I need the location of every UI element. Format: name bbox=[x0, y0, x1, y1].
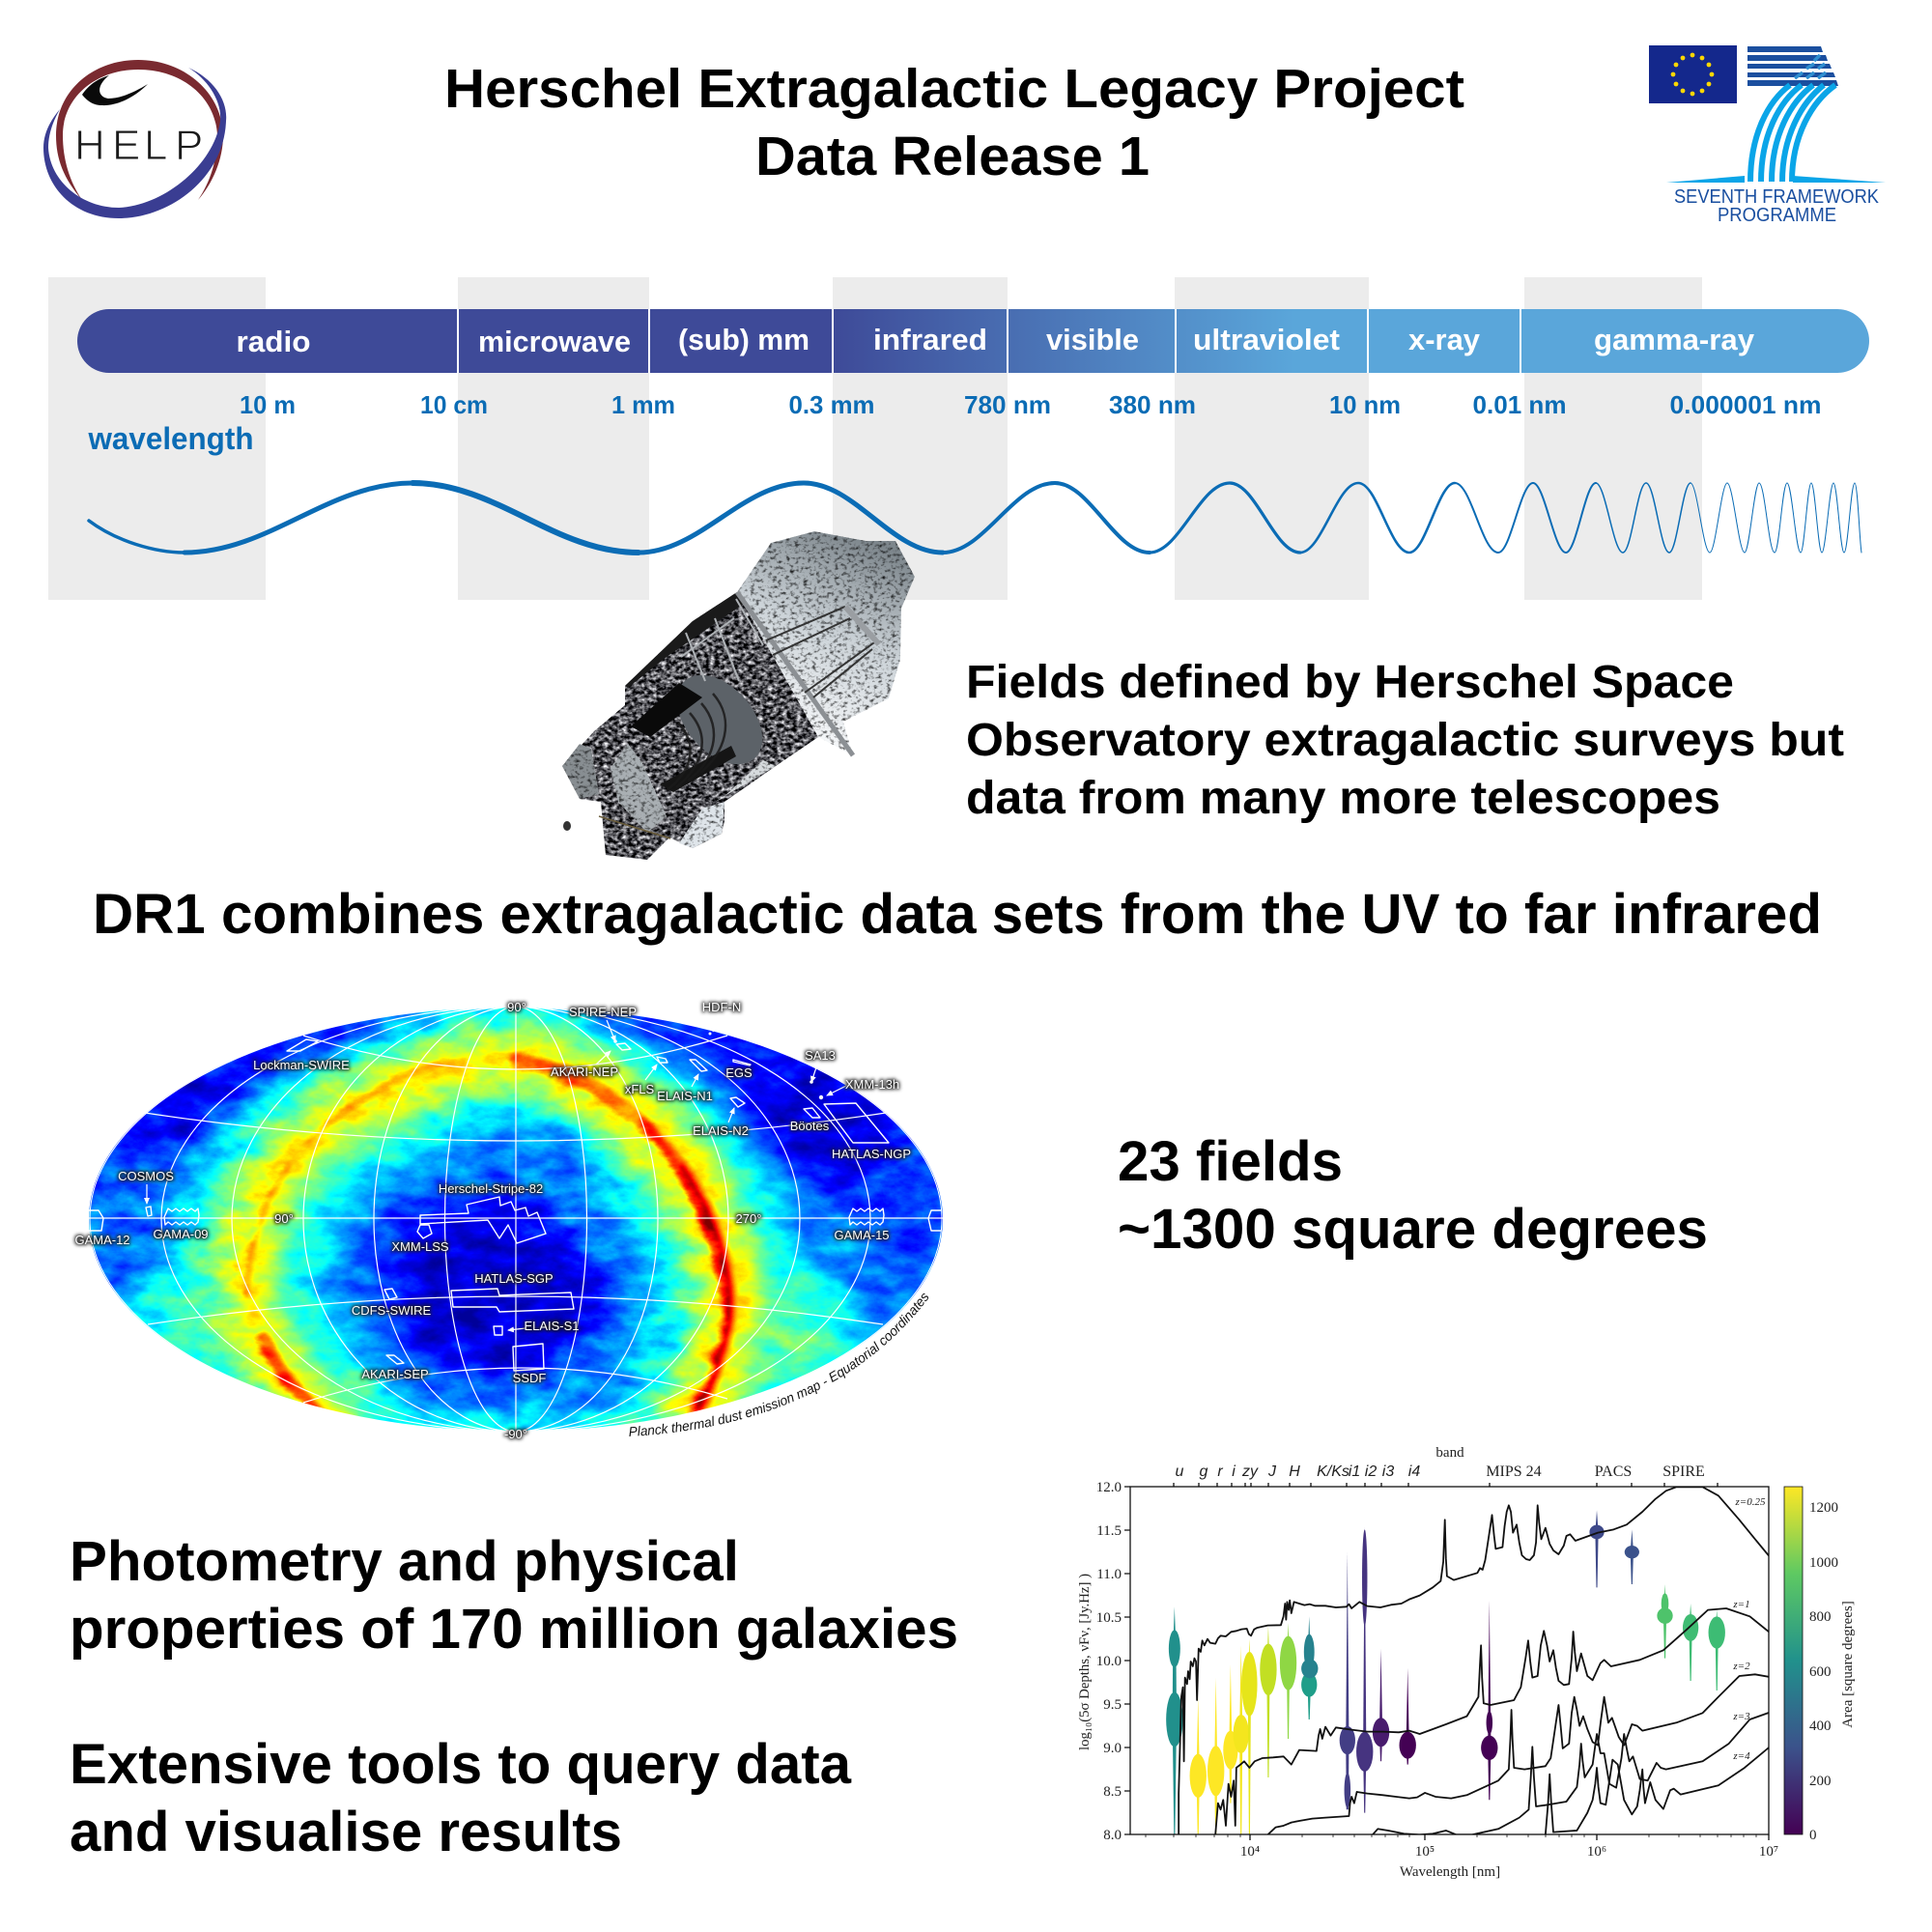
band labels: H bbox=[1289, 1463, 1300, 1480]
map caption: Planck thermal dust emission map - Equatorial coordinates bbox=[629, 1293, 928, 1436]
text block: photometry and tools: Photometry and physical bbox=[70, 1530, 739, 1593]
field labels: Lockman-SWIRE bbox=[253, 1058, 350, 1072]
field labels: ELAIS-N2 bbox=[693, 1123, 749, 1138]
SED curves bbox=[1179, 1487, 1770, 1834]
field labels: HATLAS-NGP bbox=[832, 1147, 911, 1161]
band labels: band bbox=[1435, 1445, 1464, 1461]
redshift labels: z=4 bbox=[1732, 1750, 1750, 1762]
text block: photometry and tools bbox=[70, 1530, 958, 1863]
y axis: 9.0 bbox=[1103, 1741, 1122, 1756]
y axis: 10.0 bbox=[1096, 1654, 1122, 1669]
band labels bbox=[1176, 1445, 1705, 1480]
title: Herschel Extragalactic Legacy Project bbox=[444, 58, 1464, 120]
text block: field count bbox=[1118, 1130, 1708, 1261]
field labels bbox=[74, 1000, 911, 1441]
heading: DR1 summary: DR1 combines extragalactic data sets from the UV to far infrared bbox=[93, 883, 1822, 946]
wavelength scale labels bbox=[88, 390, 1821, 456]
redshift labels bbox=[1732, 1496, 1766, 1762]
y axis: log₁₀(5σ Depths, νFν, [Jy.Hz] ) bbox=[1077, 1574, 1093, 1750]
field labels: 90° bbox=[507, 1000, 526, 1014]
x axis: 10⁵ bbox=[1415, 1844, 1435, 1860]
electromagnetic spectrum bar: ultraviolet bbox=[1193, 323, 1340, 356]
wavelength scale labels: 1 mm bbox=[611, 390, 675, 419]
heat map bbox=[89, 1008, 943, 1431]
x axis: Wavelength [nm] bbox=[1400, 1864, 1500, 1880]
text block: photometry and tools: properties of 170 million galaxies bbox=[70, 1598, 958, 1661]
text block: fields definition: Observatory extragalactic surveys but bbox=[966, 715, 1844, 766]
Planck thermal dust map with survey fields bbox=[71, 999, 943, 1442]
band labels: K/Ks bbox=[1317, 1463, 1350, 1480]
field labels: ELAIS-S1 bbox=[524, 1319, 580, 1333]
redshift labels: z=1 bbox=[1732, 1599, 1750, 1610]
y axis: 9.5 bbox=[1103, 1697, 1122, 1713]
text block: photometry and tools: and visualise results bbox=[70, 1801, 622, 1863]
x axis: 10⁴ bbox=[1240, 1844, 1260, 1860]
field labels: -90° bbox=[504, 1427, 527, 1441]
y axis: 11.0 bbox=[1096, 1567, 1122, 1582]
redshift labels: z=0.25 bbox=[1735, 1496, 1766, 1508]
text block: field count: ~1300 square degrees bbox=[1118, 1198, 1708, 1261]
field labels: Böotes bbox=[790, 1119, 830, 1133]
x axis: 10⁷ bbox=[1759, 1844, 1778, 1860]
text block: fields definition: Fields defined by Herschel Space bbox=[966, 657, 1734, 708]
band labels: g bbox=[1200, 1463, 1208, 1480]
wavelength scale labels: 0.000001 nm bbox=[1669, 390, 1822, 419]
field labels: GAMA-12 bbox=[74, 1233, 130, 1247]
field labels: 90° bbox=[274, 1211, 294, 1226]
wavelength scale labels: wavelength bbox=[88, 421, 253, 456]
field labels: AKARI-NEP bbox=[551, 1065, 618, 1079]
field labels: Herschel-Stripe-82 bbox=[439, 1181, 543, 1196]
colour bar: 200 bbox=[1809, 1774, 1832, 1789]
band labels: r bbox=[1217, 1463, 1223, 1480]
wavelength scale labels: 0.01 nm bbox=[1472, 390, 1567, 419]
y axis: 11.5 bbox=[1096, 1523, 1122, 1539]
wavelength scale labels: 0.3 mm bbox=[788, 390, 875, 419]
field labels: ELAIS-N1 bbox=[657, 1089, 713, 1103]
survey field outlines bbox=[89, 1039, 941, 1371]
colour bar: 1000 bbox=[1809, 1555, 1838, 1571]
text block: field count: 23 fields bbox=[1118, 1130, 1343, 1193]
field labels: HDF-N bbox=[702, 1000, 741, 1014]
HELP logo: HELP bbox=[74, 122, 203, 169]
colour bar: 400 bbox=[1809, 1719, 1832, 1734]
colour bar: 1200 bbox=[1809, 1500, 1838, 1516]
wave bbox=[89, 483, 1861, 553]
field labels: XMM-13h bbox=[845, 1077, 899, 1092]
colour bar: 600 bbox=[1809, 1664, 1832, 1680]
plot frame and ticks bbox=[1124, 1483, 1769, 1840]
field labels: SA13 bbox=[805, 1048, 836, 1063]
band labels: i1 bbox=[1349, 1463, 1360, 1480]
electromagnetic spectrum bar: visible bbox=[1046, 323, 1139, 356]
band labels: u bbox=[1176, 1463, 1184, 1480]
colour bar bbox=[1784, 1487, 1856, 1843]
field labels: xFLS bbox=[625, 1082, 654, 1096]
y axis: 8.5 bbox=[1103, 1784, 1122, 1800]
electromagnetic spectrum bar: infrared bbox=[873, 323, 987, 356]
field labels: EGS bbox=[725, 1065, 753, 1080]
electromagnetic spectrum bar: (sub) mm bbox=[678, 323, 810, 356]
spectrum background bands bbox=[48, 277, 1702, 600]
field labels: GAMA-15 bbox=[834, 1228, 890, 1242]
programme name: SEVENTH FRAMEWORK bbox=[1674, 186, 1880, 208]
band labels: i bbox=[1232, 1463, 1236, 1480]
field labels: GAMA-09 bbox=[153, 1227, 209, 1241]
wavelength scale labels: 10 nm bbox=[1329, 390, 1401, 419]
electromagnetic spectrum bar: microwave bbox=[478, 325, 631, 358]
HELP logo bbox=[43, 60, 226, 218]
wavelength scale labels: 10 m bbox=[240, 390, 296, 419]
electromagnetic spectrum bar: x-ray bbox=[1408, 323, 1481, 356]
title bbox=[444, 58, 1464, 187]
icon: EU flag bbox=[1649, 45, 1737, 103]
field pointers bbox=[147, 1016, 850, 1330]
band labels: PACS bbox=[1595, 1463, 1632, 1480]
band labels: zy bbox=[1241, 1463, 1259, 1480]
y axis: 12.0 bbox=[1096, 1480, 1122, 1495]
foil and panels bbox=[679, 802, 724, 848]
colour bar: 0 bbox=[1809, 1828, 1816, 1843]
band labels: i3 bbox=[1382, 1463, 1394, 1480]
electromagnetic spectrum bar: radio bbox=[236, 325, 311, 358]
field labels: XMM-LSS bbox=[391, 1239, 449, 1254]
programme name: PROGRAMME bbox=[1718, 205, 1836, 226]
y axis: 10.5 bbox=[1096, 1610, 1122, 1626]
icon: Herschel space telescope bbox=[562, 531, 915, 860]
electromagnetic spectrum bar bbox=[77, 309, 1869, 373]
wavelength scale labels: 780 nm bbox=[964, 390, 1051, 419]
colour bar: Area [square degrees] bbox=[1840, 1601, 1856, 1728]
y axis: 8.0 bbox=[1103, 1828, 1122, 1843]
text block: photometry and tools: Extensive tools to query data bbox=[70, 1733, 852, 1796]
violins bbox=[1166, 1510, 1725, 1834]
electromagnetic spectrum bar: gamma-ray bbox=[1594, 323, 1755, 356]
band labels: i2 bbox=[1365, 1463, 1377, 1480]
wavelength scale labels: 380 nm bbox=[1109, 390, 1196, 419]
field labels: SPIRE-NEP bbox=[569, 1005, 637, 1019]
text block: fields definition: data from many more telescopes bbox=[966, 773, 1720, 824]
graticule bbox=[89, 1007, 943, 1432]
y axis bbox=[1077, 1480, 1122, 1843]
redshift labels: z=3 bbox=[1732, 1711, 1750, 1722]
redshift labels: z=2 bbox=[1732, 1661, 1750, 1672]
wavelength scale labels: 10 cm bbox=[420, 390, 488, 419]
band labels: SPIRE bbox=[1662, 1463, 1705, 1480]
x axis bbox=[1240, 1844, 1778, 1880]
x axis: 10⁶ bbox=[1587, 1844, 1606, 1860]
field labels: CDFS-SWIRE bbox=[352, 1303, 431, 1318]
sunshield bbox=[737, 531, 915, 755]
colour bar: 800 bbox=[1809, 1609, 1832, 1625]
field labels: HATLAS-SGP bbox=[474, 1271, 554, 1286]
field labels: AKARI-SEP bbox=[361, 1367, 429, 1381]
FP7 logo bbox=[1649, 45, 1886, 226]
spacecraft body bbox=[562, 592, 818, 860]
field labels: SSDF bbox=[513, 1371, 546, 1385]
field labels: 270° bbox=[736, 1211, 761, 1226]
band labels: MIPS 24 bbox=[1486, 1463, 1542, 1480]
field labels: COSMOS bbox=[118, 1169, 174, 1183]
small field markers bbox=[613, 1032, 823, 1099]
chart: survey depths and galaxy SEDs bbox=[1077, 1445, 1856, 1880]
text block: fields definition bbox=[966, 657, 1844, 824]
programme name bbox=[1674, 186, 1880, 226]
icon: number seven bbox=[1666, 46, 1886, 183]
band labels: J bbox=[1267, 1463, 1277, 1480]
title: Data Release 1 bbox=[755, 126, 1150, 187]
band labels: i4 bbox=[1408, 1463, 1420, 1480]
